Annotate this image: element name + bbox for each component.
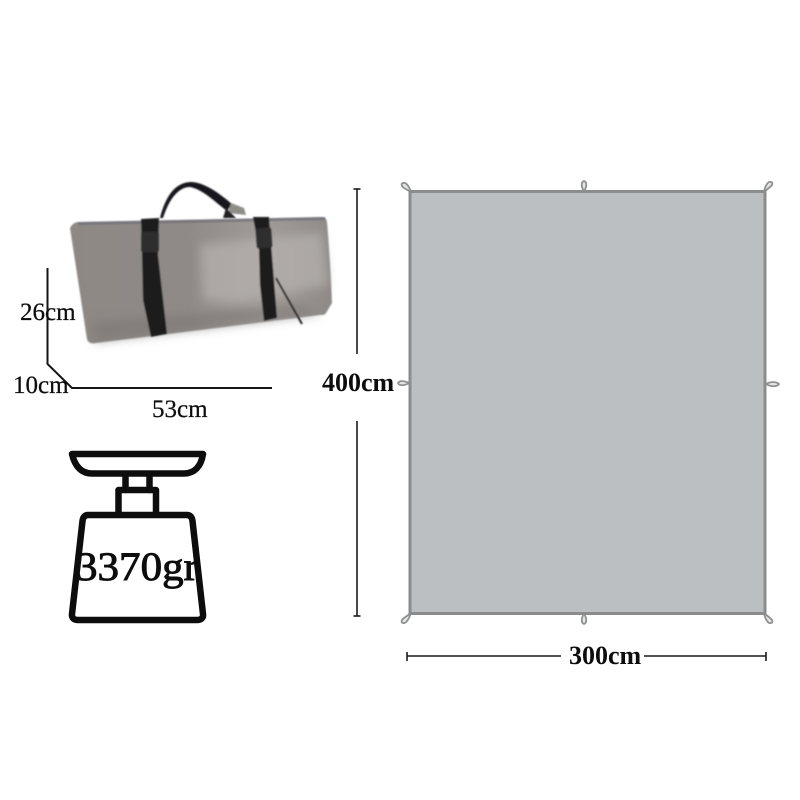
icon: weighing scale	[72, 454, 203, 620]
scale collar	[118, 490, 156, 514]
height dimension	[354, 189, 360, 616]
strap loose tail	[276, 278, 302, 324]
package dimension lines	[48, 268, 272, 388]
right buckle	[255, 227, 273, 249]
loop top middle	[582, 181, 586, 191]
loop right middle	[766, 382, 779, 386]
left buckle	[141, 232, 159, 252]
width dimension	[407, 652, 766, 661]
loop bottom right	[764, 613, 772, 623]
tarp panel	[398, 181, 779, 624]
bag body	[70, 217, 332, 343]
loop left middle	[398, 381, 409, 385]
label: 400cm: 400cm	[322, 368, 395, 397]
left strap	[141, 218, 167, 337]
loop bottom middle	[582, 614, 586, 624]
label: 53cm: 53cm	[152, 396, 208, 423]
corner and edge loops	[398, 181, 779, 624]
weight label: 3370gr: 3370gr	[76, 544, 198, 589]
loop top left	[402, 183, 411, 192]
scale pan	[72, 454, 203, 474]
label: 300cm: 300cm	[569, 641, 642, 670]
scale neck	[126, 475, 150, 490]
bag creased highlights	[90, 232, 328, 342]
rolled bag photo	[70, 182, 332, 343]
bag handle	[160, 182, 232, 218]
right strap	[253, 217, 277, 321]
loop bottom left	[402, 613, 411, 623]
loop top right	[764, 182, 772, 192]
bag top edge highlight	[78, 217, 326, 225]
label: 10cm: 10cm	[13, 372, 69, 399]
scale body	[72, 515, 203, 620]
tarp sheet	[410, 192, 765, 614]
label: 26cm: 26cm	[20, 299, 76, 326]
